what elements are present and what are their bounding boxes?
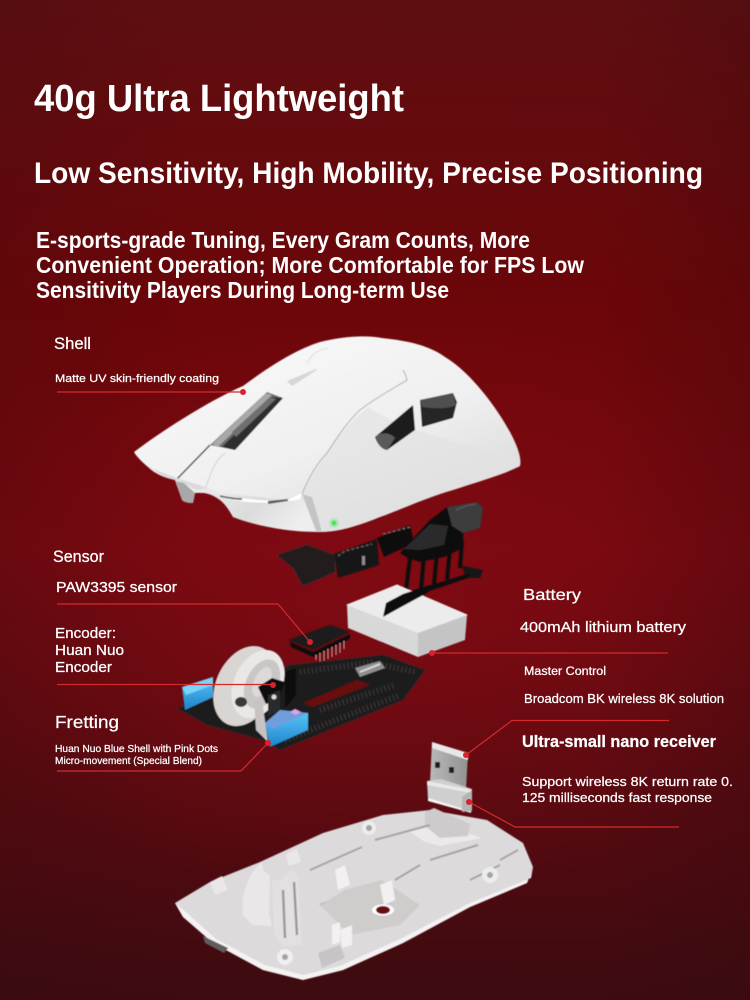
ribs bbox=[310, 825, 518, 905]
scroll wheel bbox=[201, 636, 295, 742]
label: master control: Master Control bbox=[524, 666, 606, 678]
front lower lip bbox=[183, 483, 323, 531]
label: master control: Broadcom BK wireless 8K solution bbox=[524, 692, 724, 706]
label: shell: Matte UV skin-friendly coating bbox=[55, 373, 219, 385]
exploded view: sensor chip bbox=[288, 625, 350, 663]
exploded view: main board with wheel and switches bbox=[177, 636, 425, 750]
exploded view: bottom shell bbox=[175, 808, 533, 980]
label: sensor: Sensor bbox=[53, 548, 104, 566]
lower body shading bbox=[302, 407, 520, 532]
thumb grip holes bbox=[375, 405, 415, 450]
intro paragraph bbox=[36, 227, 584, 303]
callout line: receiver collar bbox=[466, 799, 679, 827]
exploded view: mouse top shell bbox=[134, 336, 520, 532]
label: encoder: Huan Nuo bbox=[55, 643, 124, 659]
label: shell: Shell bbox=[54, 335, 91, 353]
subtitle: Low Sensitivity, High Mobility, Precise Positioning bbox=[34, 157, 703, 190]
callout line: encoder bbox=[57, 682, 276, 688]
label: shell bbox=[54, 335, 219, 385]
title: 40g Ultra Lightweight bbox=[34, 78, 404, 120]
exploded view: top plate and trigger bbox=[277, 502, 483, 616]
centre seam bbox=[177, 445, 210, 479]
intro paragraph: Sensitivity Players During Long-term Use bbox=[36, 277, 449, 303]
label: encoder bbox=[55, 626, 124, 676]
trigger legs bbox=[405, 540, 462, 598]
label: nano receiver: Support wireless 8K return rate 0. bbox=[522, 774, 733, 789]
label: battery: 400mAh lithium battery bbox=[520, 620, 687, 636]
exploded view: battery bbox=[347, 585, 467, 657]
callout line: battery bbox=[429, 650, 668, 656]
label: nano receiver: 125 milliseconds fast response bbox=[522, 790, 712, 805]
label: master control bbox=[524, 666, 724, 706]
buttons bbox=[287, 369, 317, 386]
label: sensor: PAW3395 sensor bbox=[56, 580, 177, 596]
label: fretting: Huan Nuo Blue Shell with Pink Dots bbox=[55, 743, 218, 755]
label: encoder: Encoder bbox=[55, 660, 112, 676]
label: encoder: Encoder: bbox=[55, 626, 116, 642]
label: nano receiver: Ultra-small nano receiver bbox=[522, 733, 717, 751]
callout line: receiver plug bbox=[463, 720, 669, 758]
label: fretting: Micro-movement (Special Blend) bbox=[55, 755, 202, 767]
label: fretting bbox=[55, 712, 218, 767]
callout line: sensor bbox=[57, 604, 313, 645]
callout line: shell bbox=[57, 389, 246, 395]
callout line: fretting bbox=[57, 740, 271, 771]
right button seam bbox=[302, 370, 407, 494]
label: fretting: Fretting bbox=[55, 712, 119, 732]
nose piece bbox=[176, 481, 195, 503]
label: nano receiver bbox=[522, 733, 733, 805]
label: sensor bbox=[53, 548, 177, 596]
label: battery bbox=[520, 587, 687, 636]
label: battery: Battery bbox=[523, 587, 581, 604]
exploded view: nano receiver bbox=[427, 742, 472, 813]
tall posts bbox=[242, 862, 272, 926]
raised rear floor bbox=[410, 826, 482, 846]
intro paragraph: Convenient Operation; More Comfortable for FPS Low bbox=[36, 252, 584, 278]
wheel window bbox=[210, 392, 283, 450]
intro paragraph: E-sports-grade Tuning, Every Gram Counts, More bbox=[36, 227, 530, 253]
central recess bbox=[320, 880, 420, 935]
